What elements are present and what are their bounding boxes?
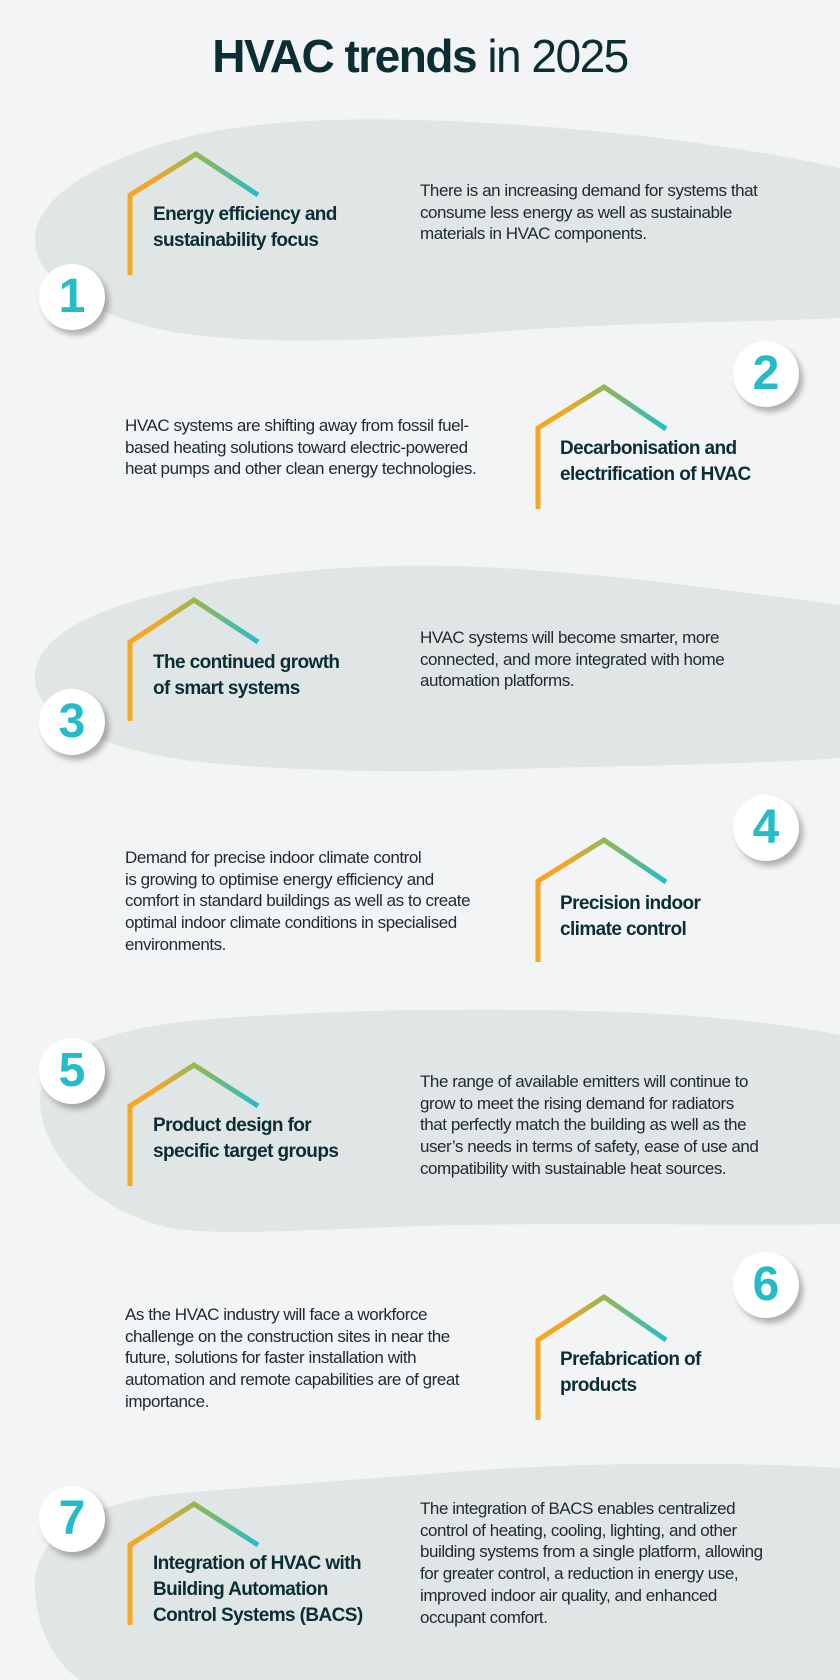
panel: trend 2	[536, 384, 668, 509]
heading 3: of smart systems	[153, 678, 300, 699]
text 3: HVAC systems will become smarter, more	[420, 628, 719, 647]
text 5: user’s needs in terms of safety, ease of use and	[420, 1137, 758, 1156]
icon: house 7	[128, 1501, 260, 1625]
number 7	[39, 1486, 105, 1552]
panel: trend 3	[128, 597, 260, 721]
number 6	[733, 1252, 799, 1318]
text 7: The integration of BACS enables centralized	[420, 1499, 735, 1518]
heading 3	[153, 652, 339, 699]
text 4: Demand for precise indoor climate control	[125, 848, 421, 867]
text 2: HVAC systems are shifting away from fossil fuel-	[125, 416, 469, 435]
text 7: building systems from a single platform, allowing	[420, 1542, 763, 1561]
text 6	[125, 1305, 460, 1411]
heading 1	[153, 204, 337, 251]
number 1	[39, 264, 105, 330]
heading 5: Product design for	[153, 1115, 311, 1136]
text 2	[125, 416, 476, 478]
icon: house 5	[128, 1062, 260, 1186]
icon: house 1	[128, 151, 260, 275]
heading 2	[560, 438, 751, 485]
heading 5: specific target groups	[153, 1141, 338, 1162]
text 1: materials in HVAC components.	[420, 224, 647, 243]
text 1: There is an increasing demand for systems that	[420, 181, 757, 200]
number 2: 2	[753, 347, 779, 400]
text 4: comfort in standard buildings as well as to create	[125, 891, 470, 910]
panel: trend 4	[536, 837, 668, 962]
number 5: 5	[59, 1044, 85, 1097]
heading 2: Decarbonisation and	[560, 438, 737, 459]
text 6: automation and remote capabilities are of great	[125, 1370, 459, 1389]
icon: house 2	[536, 384, 668, 509]
text 5	[420, 1072, 758, 1178]
text 7	[420, 1499, 763, 1627]
text 6: challenge on the construction sites in near the	[125, 1327, 450, 1346]
heading 7: Building Automation	[153, 1579, 328, 1600]
text 4	[125, 848, 470, 954]
text 5: that perfectly match the building as well as the	[420, 1115, 746, 1134]
number 2	[733, 341, 799, 407]
heading 6	[560, 1349, 702, 1396]
icon: house 6	[536, 1294, 668, 1420]
text 6: future, solutions for faster installation with	[125, 1348, 416, 1367]
heading 7: Integration of HVAC with	[153, 1553, 361, 1574]
text 7: improved indoor air quality, and enhanced	[420, 1586, 717, 1605]
text 3: automation platforms.	[420, 671, 574, 690]
number 4: 4	[753, 801, 779, 854]
title: HVAC trends in 2025	[212, 30, 628, 82]
heading 6: Prefabrication of	[560, 1349, 701, 1370]
text 4: optimal indoor climate conditions in specialised	[125, 913, 457, 932]
heading 6: products	[560, 1375, 636, 1396]
text 3: connected, and more integrated with home	[420, 650, 724, 669]
text 5: compatibility with sustainable heat sources.	[420, 1159, 726, 1178]
icon: house 3	[128, 597, 260, 721]
number 3: 3	[59, 695, 85, 748]
heading 1: Energy efficiency and	[153, 204, 337, 225]
text 7: occupant comfort.	[420, 1608, 547, 1627]
heading 3: The continued growth	[153, 652, 339, 673]
text 6: importance.	[125, 1392, 209, 1411]
number 1: 1	[59, 270, 85, 323]
text 1	[420, 181, 758, 243]
icon: house 4	[536, 837, 668, 962]
panel: trend 7	[128, 1501, 260, 1625]
number 4	[733, 795, 799, 861]
text 5: grow to meet the rising demand for radiators	[420, 1094, 734, 1113]
heading 7: Control Systems (BACS)	[153, 1605, 363, 1626]
panel: trend 6	[536, 1294, 668, 1420]
panel: trend 1	[128, 151, 260, 275]
number 6: 6	[753, 1258, 779, 1311]
text 5: The range of available emitters will continue to	[420, 1072, 748, 1091]
heading 4: Precision indoor	[560, 893, 700, 914]
number 5	[39, 1038, 105, 1104]
heading 1: sustainability focus	[153, 230, 318, 251]
number 7: 7	[59, 1492, 85, 1545]
panel: trend 5	[128, 1062, 260, 1186]
text 4: environments.	[125, 935, 226, 954]
text 3	[420, 628, 724, 690]
number 3	[39, 689, 105, 755]
text 4: is growing to optimise energy efficiency and	[125, 870, 434, 889]
heading 5	[153, 1115, 338, 1162]
text 1: consume less energy as well as sustainable	[420, 203, 732, 222]
text 7: control of heating, cooling, lighting, and other	[420, 1521, 737, 1540]
text 6: As the HVAC industry will face a workforce	[125, 1305, 427, 1324]
heading 7	[153, 1553, 363, 1626]
text 2: heat pumps and other clean energy technologies.	[125, 459, 476, 478]
text 7: for greater control, a reduction in energy use,	[420, 1564, 738, 1583]
heading 4	[560, 893, 701, 940]
heading 2: electrification of HVAC	[560, 464, 751, 485]
text 2: based heating solutions toward electric-powered	[125, 438, 468, 457]
heading 4: climate control	[560, 919, 686, 940]
